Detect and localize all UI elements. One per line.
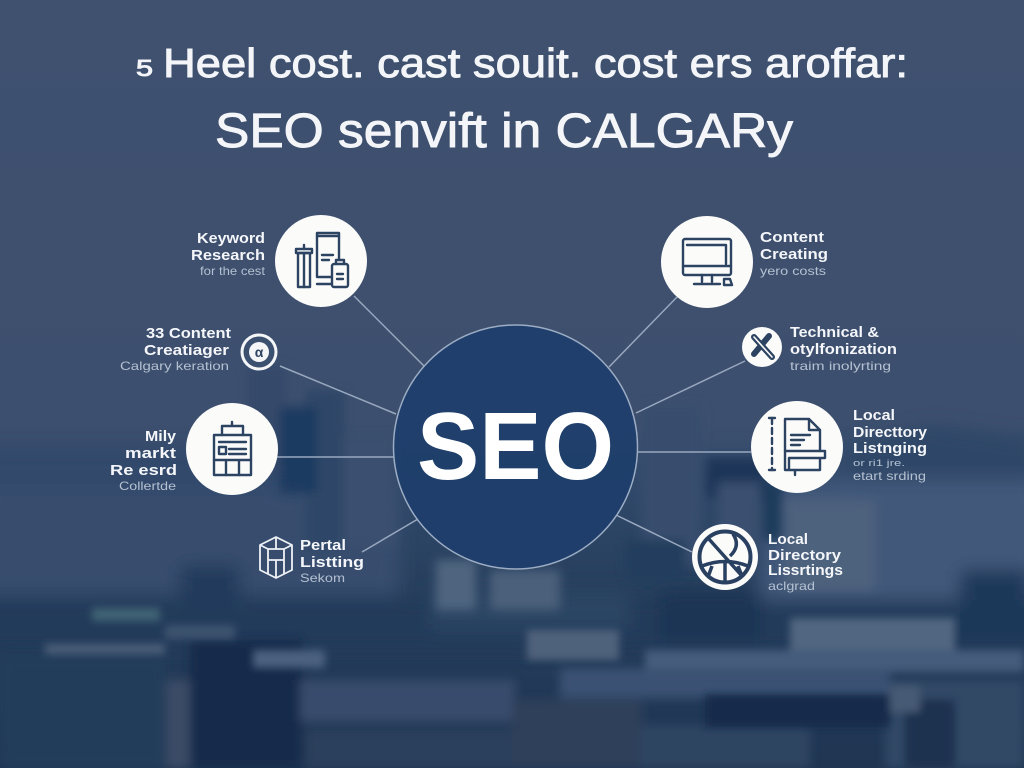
label: Creatiager xyxy=(144,342,229,359)
label: Technical & xyxy=(790,324,879,341)
node: keyword research xyxy=(191,215,367,307)
label xyxy=(790,324,897,373)
label: Calgary keration xyxy=(120,359,229,373)
icon: monitor xyxy=(661,216,753,308)
title: Heel cost. cast souit. cost ers aroffar: xyxy=(163,40,908,86)
label: traim inolyrting xyxy=(790,359,891,373)
label: Mily xyxy=(145,428,177,445)
title: 5 xyxy=(136,55,153,81)
label xyxy=(191,230,266,278)
label: Directory xyxy=(768,547,842,564)
node: market research xyxy=(110,403,278,495)
label xyxy=(768,531,843,593)
label: Directtory xyxy=(853,424,928,441)
label: Keyword xyxy=(197,230,265,247)
label: aclgrad xyxy=(768,579,815,593)
icon: document xyxy=(751,401,843,493)
node: local directory listing xyxy=(751,401,928,493)
icon: phone and bottle xyxy=(275,215,367,307)
node: portal listing xyxy=(260,537,364,585)
icon: badge xyxy=(240,334,278,370)
label: 33 Content xyxy=(146,325,231,342)
label: Lissrtings xyxy=(768,562,843,579)
label: Content xyxy=(760,229,824,246)
label: Research xyxy=(191,247,265,264)
label: or ri1 jre. xyxy=(853,458,905,468)
label xyxy=(760,229,828,278)
label: Creating xyxy=(760,246,828,263)
label xyxy=(853,407,928,483)
icon: building xyxy=(186,403,278,495)
label: Listnging xyxy=(853,440,927,457)
label: Local xyxy=(853,407,895,424)
node: local directory listings xyxy=(692,524,843,593)
central SEO circle: SEO xyxy=(417,393,614,500)
label: otylfonization xyxy=(790,341,897,358)
node: content creation xyxy=(120,325,278,373)
title: SEO senvift in CALGARy xyxy=(215,105,793,158)
label: Collertde xyxy=(119,479,176,493)
label: Local xyxy=(768,531,808,548)
label xyxy=(110,428,177,493)
label: for the cest xyxy=(200,264,266,278)
label: Pertal xyxy=(300,537,346,554)
connector lines xyxy=(276,296,751,552)
label: yero costs xyxy=(760,264,826,278)
label xyxy=(300,537,364,585)
label: Sekom xyxy=(300,571,345,585)
label: Listting xyxy=(300,554,364,571)
label: markt xyxy=(125,445,176,462)
icon: badge: α xyxy=(255,344,264,360)
node: technical optimization xyxy=(742,324,897,373)
label: etart srding xyxy=(853,469,926,483)
icon: wireframe cube xyxy=(260,537,292,578)
label xyxy=(120,325,231,373)
icon: crossed tools xyxy=(742,327,782,367)
node: content creating xyxy=(661,216,828,308)
icon: globe xyxy=(692,524,758,590)
central SEO circle xyxy=(394,325,638,569)
title xyxy=(136,40,908,158)
label: Re esrd xyxy=(110,462,177,479)
